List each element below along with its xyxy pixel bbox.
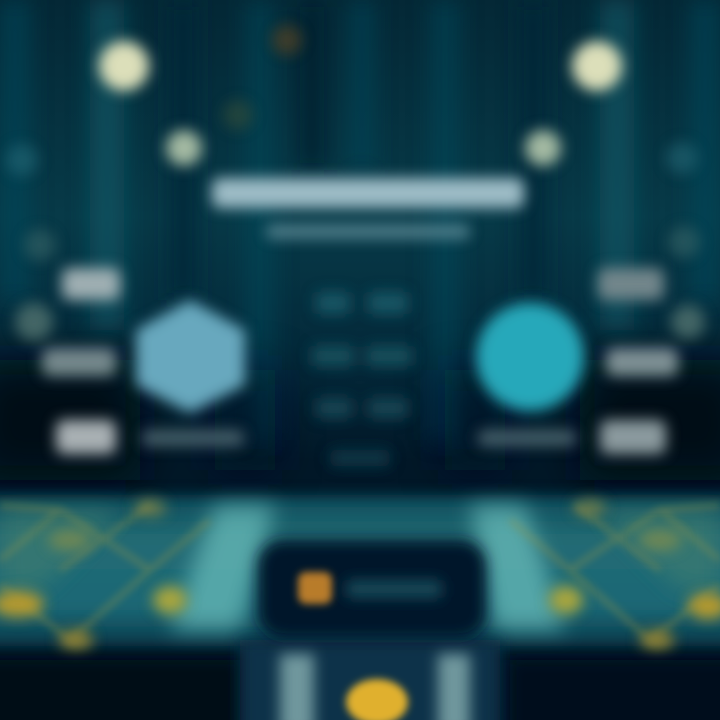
icon: orange square (298, 572, 332, 604)
gold lattice (0, 505, 720, 640)
console panel (258, 540, 486, 638)
bottom dark band (0, 660, 720, 720)
console legs (280, 654, 314, 720)
icon: hexagon (136, 300, 245, 413)
center column (312, 292, 412, 466)
right panel: labels and circle (476, 268, 678, 454)
glowing orbs: top (6, 25, 705, 341)
console label (346, 580, 442, 598)
left panel: labels and hexagon (42, 268, 245, 454)
icon: circle (476, 303, 584, 411)
title block (212, 178, 524, 239)
gold nodes (0, 500, 720, 650)
central console (240, 540, 500, 720)
floor panel (0, 496, 720, 650)
icon: yellow button (346, 679, 408, 720)
